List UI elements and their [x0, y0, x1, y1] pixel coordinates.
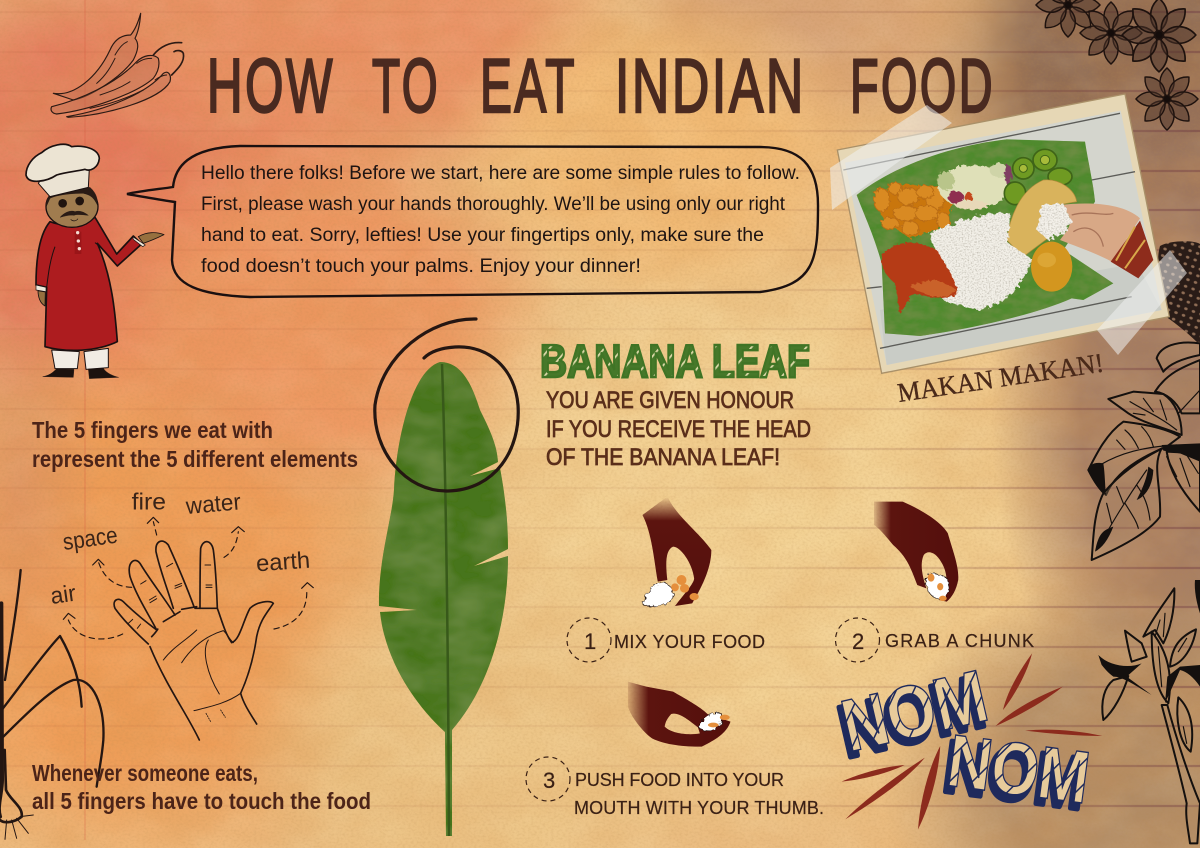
element labels: water — [184, 488, 242, 519]
chef character — [26, 144, 164, 379]
step 3: push food: MOUTH WITH YOUR THUMB. — [574, 798, 824, 818]
nom nom lettering: NOM — [834, 654, 995, 768]
plant: lower right — [1098, 580, 1200, 843]
icon: chillies — [51, 13, 184, 117]
fish curry — [881, 243, 957, 313]
banana leaf in photo — [857, 139, 1113, 336]
element labels: fire — [132, 488, 166, 514]
element labels — [49, 488, 311, 609]
icon: star anise cluster — [1036, 0, 1198, 130]
step 1: mix your food — [567, 497, 765, 662]
banana leaf text: OF THE BANANA LEAF! — [546, 444, 780, 471]
nom nom lettering: NOM — [831, 660, 992, 774]
step 1: mix your food: MIX YOUR FOOD — [614, 632, 765, 652]
step 2: grab a chunk: 2 — [852, 629, 864, 654]
hand diagram with elements — [49, 488, 313, 740]
step 1: mix your food: 1 — [584, 629, 596, 654]
photo: banana leaf meal — [837, 94, 1169, 373]
text: five fingers: The 5 fingers we eat with — [32, 417, 273, 443]
step 2: grab a chunk: GRAB A CHUNK — [885, 631, 1034, 651]
banana leaf text — [546, 387, 811, 471]
hand outline — [114, 541, 273, 740]
heading: banana leaf: BANANA LEAF — [540, 335, 810, 387]
title: HOW — [207, 44, 335, 129]
leaf head circle — [375, 319, 518, 491]
text: five fingers: represent the 5 different elements — [32, 446, 358, 472]
text: whenever someone eats — [32, 760, 371, 814]
plant: mint leaves right — [1088, 342, 1200, 560]
speech bubble: hand to eat. Sorry, lefties! Use your fingertips only, make sure the — [201, 225, 764, 246]
speech bubble: food doesn’t touch your palms. Enjoy your dinner! — [201, 256, 641, 277]
tape strips — [830, 105, 1187, 355]
speech bubble: Hello there folks! Before we start, here are some simple rules to follow. — [201, 163, 800, 184]
title: INDIAN — [615, 44, 806, 129]
rice — [930, 213, 1033, 310]
speech bubble: First, please wash your hands thoroughly. We’ll be using only our right — [201, 194, 786, 215]
salad — [937, 163, 1012, 210]
nom nom lettering: NOM — [939, 725, 1091, 825]
nom nom lettering — [831, 653, 1102, 829]
step 2: grab a chunk — [836, 502, 1034, 662]
dashed arrows — [63, 517, 313, 639]
step 3: push food: PUSH FOOD INTO YOUR — [575, 770, 784, 790]
plant: dark seed cluster behind photo — [1158, 241, 1200, 345]
photo caption: MAKAN MAKAN! — [895, 348, 1106, 408]
title: FOOD — [850, 44, 995, 129]
nom nom lettering: NOM — [943, 719, 1095, 819]
text: whenever someone eats: Whenever someone eats, — [32, 760, 258, 786]
plant: left stalks — [0, 570, 103, 839]
text: whenever someone eats: all 5 fingers have to touch the food — [32, 788, 371, 814]
title: EAT — [480, 44, 577, 129]
title: TO — [372, 44, 440, 129]
step 3: push food — [526, 682, 824, 818]
element labels: earth — [255, 547, 311, 576]
curry — [874, 182, 953, 238]
element labels: space — [61, 522, 119, 555]
banana leaf text: YOU ARE GIVEN HONOUR — [546, 387, 794, 414]
speech bubble — [127, 146, 818, 297]
step 3: push food: 3 — [543, 768, 555, 793]
text: five fingers — [32, 417, 358, 472]
banana leaf illustration — [379, 362, 508, 836]
element labels: air — [49, 580, 78, 609]
title — [207, 44, 995, 129]
banana leaf text: IF YOU RECEIVE THE HEAD — [546, 416, 811, 443]
green peppers — [1004, 149, 1072, 205]
